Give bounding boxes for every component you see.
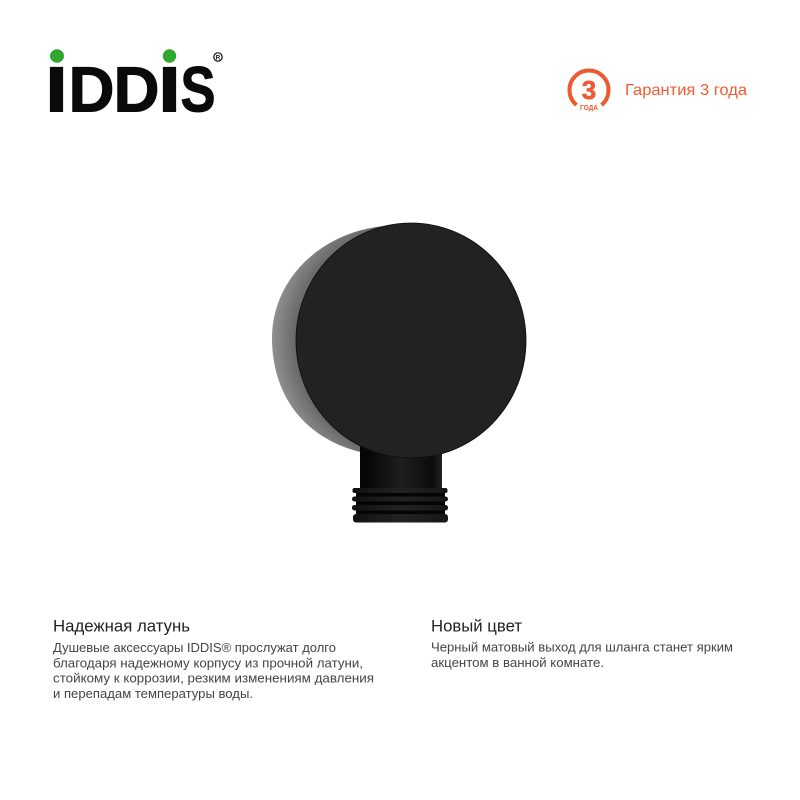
registered mark: [214, 53, 222, 61]
body text: акцентом в ванной комнате.: [431, 655, 604, 670]
product: shower hose outlet: [272, 223, 526, 522]
body text: [53, 640, 374, 701]
logo wordmark: S: [180, 54, 216, 126]
body side: [272, 226, 400, 454]
body text: [431, 640, 733, 670]
front disc: [296, 223, 526, 458]
registered mark: R: [216, 54, 221, 61]
logo: IDDIS: [45, 49, 222, 125]
icon: 3 year ring: [570, 71, 608, 112]
logo wordmark: D: [114, 54, 160, 126]
logo wordmark: I: [45, 54, 68, 126]
text block: brass: [53, 616, 374, 701]
logo wordmark: I: [158, 54, 181, 126]
logo green dots: [50, 49, 176, 63]
body text: Черный матовый выход для шланга станет ярким: [431, 640, 733, 654]
heading: Новый цвет: [431, 616, 522, 636]
text block: new colour: [431, 616, 733, 670]
body text: Душевые аксессуары IDDIS® прослужат долго: [53, 640, 336, 655]
neck: [360, 445, 442, 491]
icon: 3 year ring: 3: [582, 75, 596, 105]
warranty text: Гарантия 3 года: [625, 82, 747, 99]
icon: 3 year ring: ГОДА: [580, 105, 598, 112]
logo wordmark: [45, 54, 216, 126]
heading: Надежная латунь: [53, 616, 190, 636]
body text: благодаря надежному корпусу из прочной латуни,: [53, 655, 363, 670]
threaded connector: [352, 488, 448, 522]
body text: и перепадам температуры воды.: [53, 686, 253, 701]
body text: стойкому к коррозии, резким изменениям давления: [53, 671, 374, 686]
logo wordmark: D: [68, 54, 114, 126]
warranty badge: [570, 71, 747, 112]
